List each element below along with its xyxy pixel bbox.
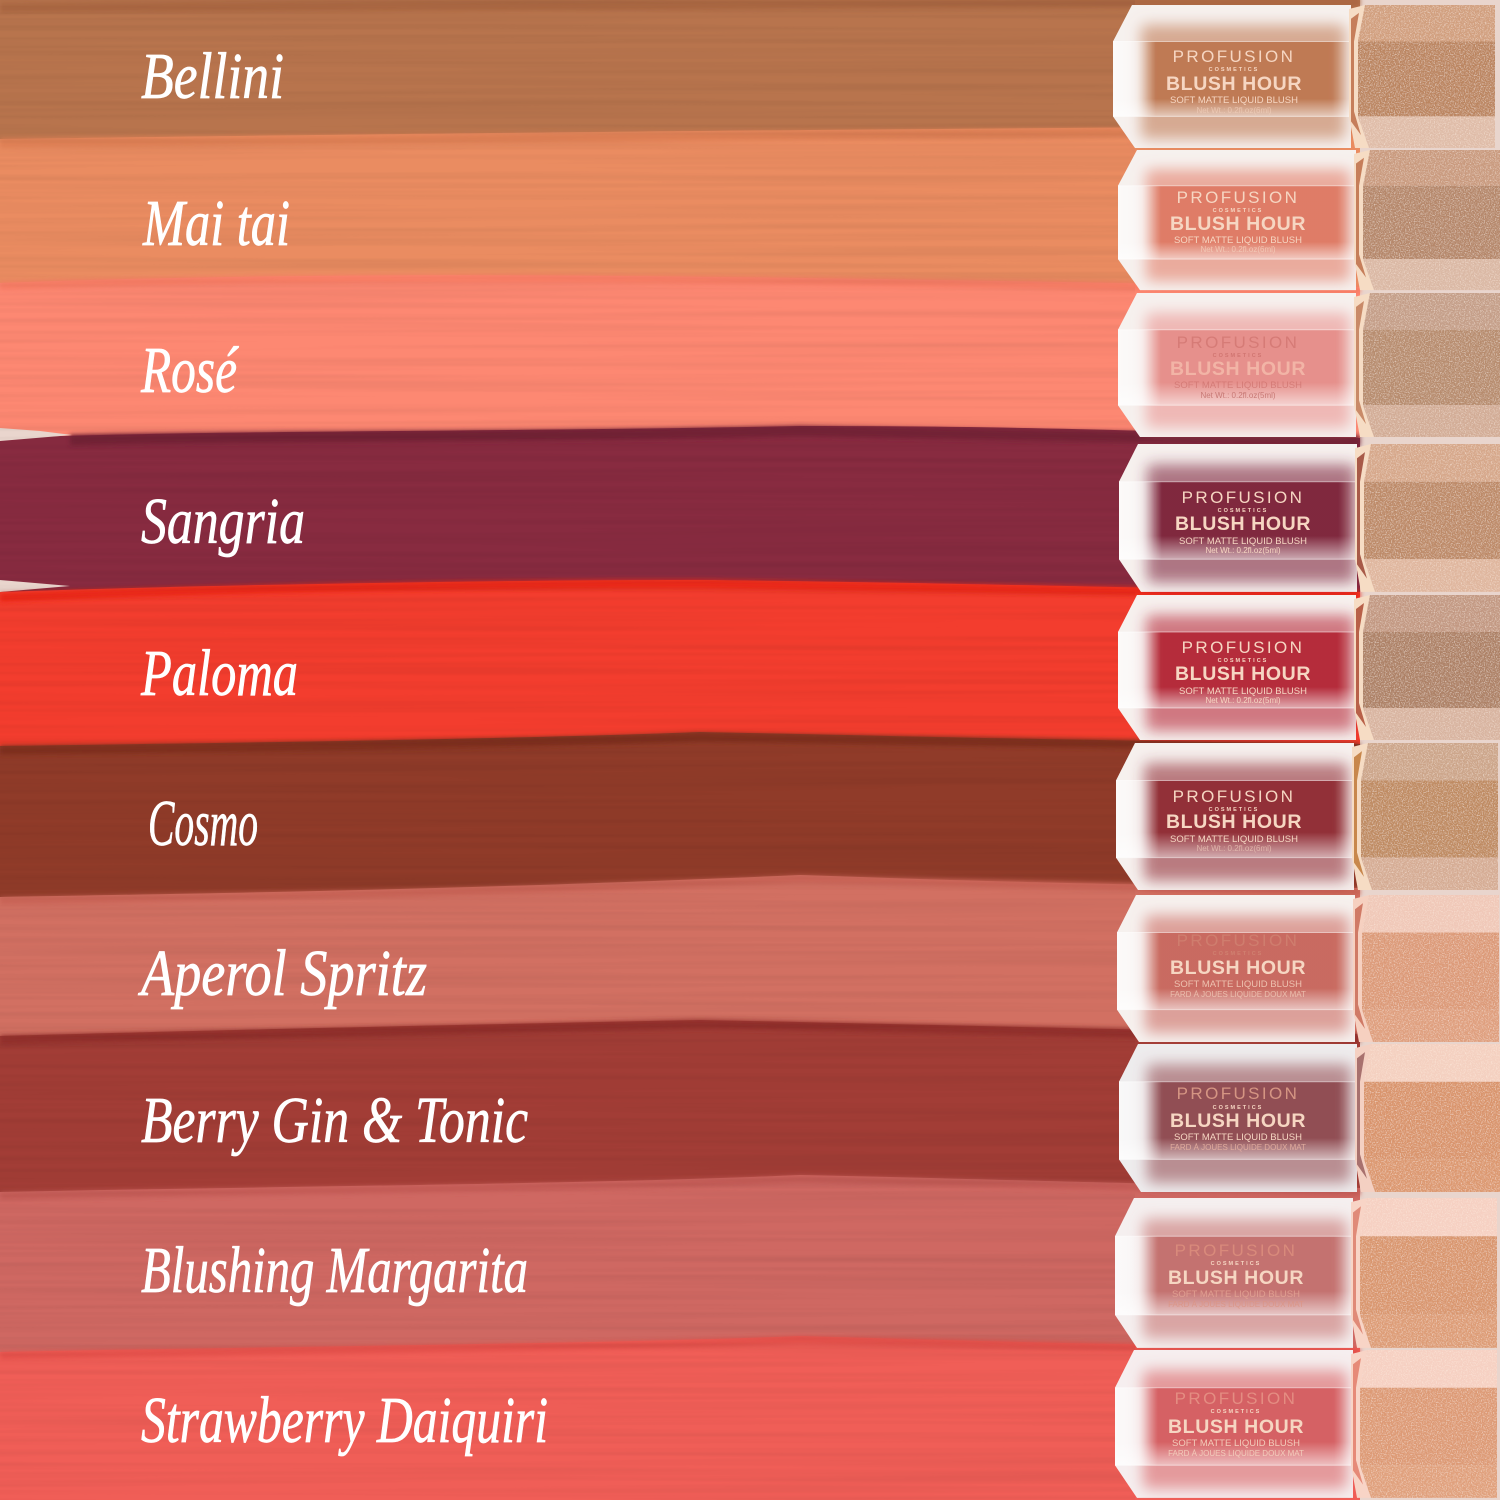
bottle text: Blushing Margarita — [1168, 1241, 1304, 1309]
bottle text: Paloma — [1175, 638, 1311, 705]
label: Strawberry Daiquiri: Strawberry Daiquiri — [141, 1384, 548, 1457]
bottle text: Bellini: Net Wt.: 0.2fl.oz(6ml) — [1196, 106, 1272, 115]
bottle text: Paloma: COSMETICS — [1218, 658, 1268, 664]
bottle: Cosmo — [1116, 743, 1498, 890]
bottle: Aperol Spritz — [1117, 895, 1499, 1042]
bottle text: Strawberry Daiquiri: SOFT MATTE LIQUID BLUSH — [1172, 1438, 1300, 1449]
bottle text: Strawberry Daiquiri: FARD À JOUES LIQUIDE DOUX MAT — [1168, 1449, 1304, 1458]
bottle text: Aperol Spritz: FARD À JOUES LIQUIDE DOUX MAT — [1170, 990, 1306, 999]
swatch: Paloma — [0, 580, 1360, 750]
bottle text: Rosé — [1170, 333, 1306, 400]
swatch: Rosé — [0, 275, 1360, 445]
bottle text: Rosé: COSMETICS — [1213, 353, 1263, 359]
bottle text: Rosé: BLUSH HOUR — [1170, 358, 1306, 380]
bottle text: Mai tai: PROFUSION — [1177, 188, 1299, 207]
swatch: Strawberry Daiquiri — [0, 1336, 1360, 1500]
bottle text: Aperol Spritz — [1170, 931, 1306, 999]
bottle text: Rosé: Net Wt.: 0.2fl.oz(5ml) — [1200, 391, 1276, 400]
bottle text: Cosmo: SOFT MATTE LIQUID BLUSH — [1170, 834, 1298, 845]
bottle text: Rosé: PROFUSION — [1177, 333, 1299, 352]
bottle text: Berry Gin & Tonic: BLUSH HOUR — [1170, 1110, 1306, 1132]
bottle text: Strawberry Daiquiri: COSMETICS — [1211, 1409, 1261, 1415]
bottle: Berry Gin & Tonic — [1119, 1044, 1500, 1192]
bottle text: Aperol Spritz: COSMETICS — [1213, 951, 1263, 957]
bottle text: Sangria: PROFUSION — [1182, 488, 1304, 507]
swatch: Cosmo — [0, 732, 1360, 900]
bottle text: Sangria — [1175, 488, 1311, 555]
bottle text: Aperol Spritz: SOFT MATTE LIQUID BLUSH — [1174, 979, 1302, 990]
bottle text: Sangria: BLUSH HOUR — [1175, 513, 1311, 535]
bottle text: Strawberry Daiquiri: BLUSH HOUR — [1168, 1416, 1304, 1438]
swatch: Bellini — [0, 0, 1360, 150]
bottle text: Sangria: Net Wt.: 0.2fl.oz(5ml) — [1205, 546, 1281, 555]
bottle text: Cosmo: BLUSH HOUR — [1166, 811, 1302, 833]
bottle: Bellini — [1113, 5, 1495, 148]
bottle: Blushing Margarita — [1115, 1198, 1497, 1348]
bottle: Strawberry Daiquiri — [1115, 1350, 1497, 1498]
bottle text: Blushing Margarita: BLUSH HOUR — [1168, 1267, 1304, 1289]
bottle: Sangria — [1119, 444, 1500, 592]
swatch: Sangria — [0, 426, 1360, 595]
bottle text: Mai tai — [1170, 188, 1306, 254]
bottle text: Paloma: BLUSH HOUR — [1175, 663, 1311, 685]
bottle text: Bellini: COSMETICS — [1209, 67, 1259, 73]
bottle text: Bellini: PROFUSION — [1173, 47, 1295, 66]
bottle text: Sangria: SOFT MATTE LIQUID BLUSH — [1179, 536, 1307, 547]
bottle text: Blushing Margarita: COSMETICS — [1211, 1261, 1261, 1267]
bottle text: Mai tai: SOFT MATTE LIQUID BLUSH — [1174, 235, 1302, 246]
label: Paloma: Paloma — [140, 637, 298, 710]
bottle text: Blushing Margarita: PROFUSION — [1175, 1241, 1297, 1260]
bottle text: Blushing Margarita: FARD À JOUES LIQUIDE DOUX MAT — [1168, 1300, 1304, 1309]
bottle text: Sangria: COSMETICS — [1218, 508, 1268, 514]
bottle text: Paloma: SOFT MATTE LIQUID BLUSH — [1179, 686, 1307, 697]
bottle text: Paloma: Net Wt.: 0.2fl.oz(5ml) — [1205, 696, 1281, 705]
bottle text: Mai tai: Net Wt.: 0.2fl.oz(6ml) — [1200, 245, 1276, 254]
bottle text: Rosé: SOFT MATTE LIQUID BLUSH — [1174, 380, 1302, 391]
bottle: Rosé — [1118, 293, 1500, 437]
bottle text: Aperol Spritz: BLUSH HOUR — [1170, 957, 1306, 979]
swatch: Berry Gin & Tonic — [0, 1020, 1360, 1195]
label: Bellini: Bellini — [141, 40, 284, 113]
bottle text: Strawberry Daiquiri — [1168, 1389, 1304, 1458]
bottle text: Mai tai: COSMETICS — [1213, 208, 1263, 214]
bottle text: Berry Gin & Tonic: SOFT MATTE LIQUID BLUSH — [1174, 1132, 1302, 1143]
bottle text: Mai tai: BLUSH HOUR — [1170, 213, 1306, 235]
label: Sangria: Sangria — [141, 485, 305, 558]
bottle text: Cosmo: COSMETICS — [1209, 807, 1259, 813]
bottle text: Berry Gin & Tonic: COSMETICS — [1213, 1105, 1263, 1111]
swatch: Aperol Spritz — [0, 875, 1360, 1040]
bottle text: Bellini: BLUSH HOUR — [1166, 73, 1302, 95]
bottle text: Paloma: PROFUSION — [1182, 638, 1304, 657]
bottle text: Cosmo: Net Wt.: 0.2fl.oz(6ml) — [1196, 844, 1272, 853]
bottle text: Strawberry Daiquiri: PROFUSION — [1175, 1389, 1297, 1408]
swatch: Mai tai — [0, 126, 1360, 290]
pale gap at swatch end — [0, 428, 72, 441]
bottle text: Berry Gin & Tonic — [1170, 1084, 1306, 1152]
label: Mai tai: Mai tai — [142, 187, 290, 260]
bottle text: Berry Gin & Tonic: PROFUSION — [1177, 1084, 1299, 1103]
bottle text: Cosmo — [1166, 787, 1302, 853]
label: Aperol Spritz: Aperol Spritz — [138, 937, 427, 1010]
bottle: Paloma — [1118, 595, 1500, 740]
label: Cosmo: Cosmo — [148, 787, 258, 860]
bottle text: Aperol Spritz: PROFUSION — [1177, 931, 1299, 950]
label: Berry Gin & Tonic: Berry Gin & Tonic — [141, 1084, 528, 1157]
bottle text: Bellini: SOFT MATTE LIQUID BLUSH — [1170, 95, 1298, 106]
bottle text: Cosmo: PROFUSION — [1173, 787, 1295, 806]
swatch: Blushing Margarita — [0, 1175, 1360, 1355]
label: Blushing Margarita: Blushing Margarita — [141, 1234, 528, 1307]
bottle text: Berry Gin & Tonic: FARD À JOUES LIQUIDE DOUX MAT — [1170, 1143, 1306, 1152]
bottle text: Blushing Margarita: SOFT MATTE LIQUID BLUSH — [1172, 1289, 1300, 1300]
label: Rosé: Rosé — [140, 334, 239, 407]
bottle text: Bellini — [1166, 47, 1302, 115]
bottle: Mai tai — [1118, 150, 1500, 290]
